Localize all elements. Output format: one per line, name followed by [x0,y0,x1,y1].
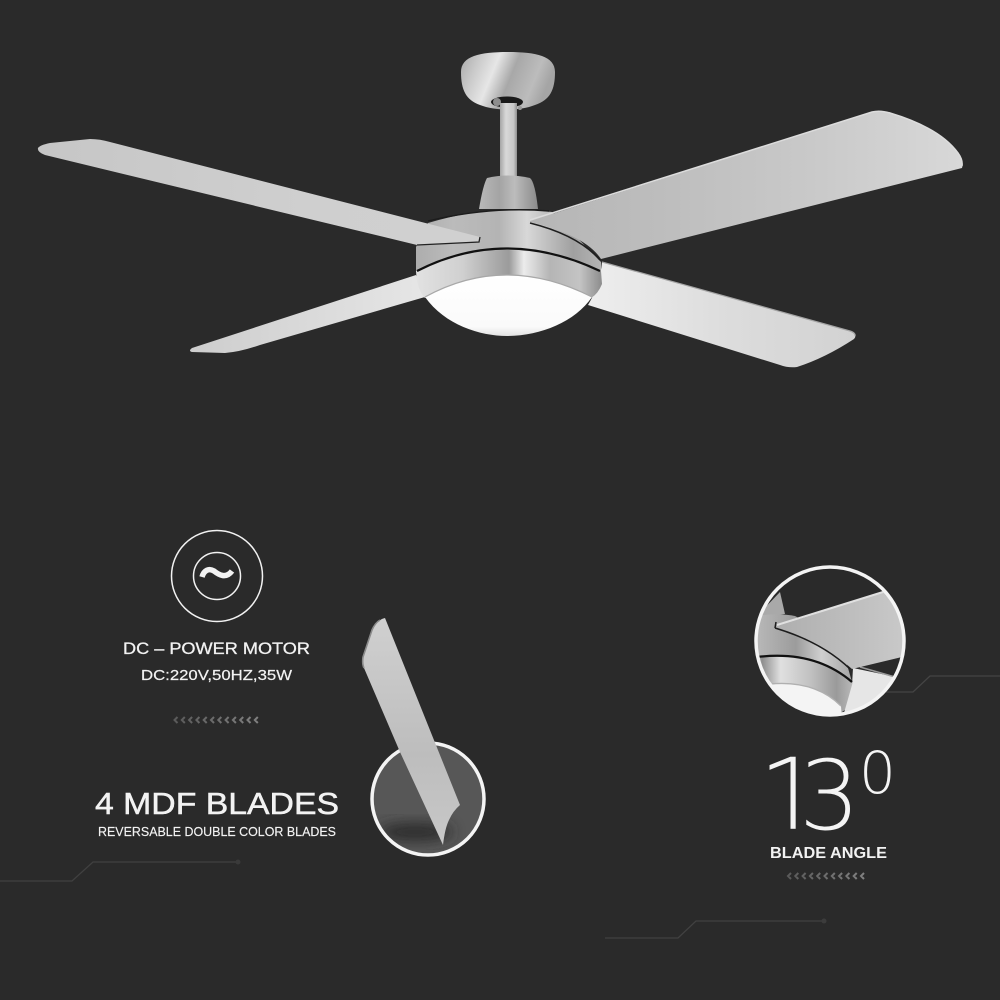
detail: housing [758,614,852,680]
light dome [425,275,592,336]
trim ring [416,248,602,298]
detail: lower blade [844,668,892,712]
detail: trim ring [760,656,852,712]
down rod [500,103,517,176]
number: 13 degrees: 3 [799,740,860,852]
blade side view [363,618,460,845]
number: 13 degrees [755,736,896,858]
icon: DC motor [172,530,262,622]
text: DC power motor: DC – POWER MOTOR [123,639,310,658]
number: 13 degrees: 1 [758,736,825,858]
circuit line: bottom [605,918,826,938]
ceiling mount [461,52,555,110]
detail: upper blade [780,592,902,669]
text: reversible blades: REVERSABLE DOUBLE COLOR BLADES [98,824,336,839]
circuit line: lower left [0,860,240,881]
circle: blade angle detail [750,567,910,720]
motor housing [416,210,601,272]
blade: upper left [38,139,480,245]
text: DC rating: DC:220V,50HZ,35W [141,668,292,684]
circle: blade side view [372,743,484,855]
detail: motor neck [762,592,785,616]
blade: upper right [530,111,962,260]
number: 13 degrees: 0 [859,739,896,807]
ceiling fan [38,52,962,367]
blade: lower right [588,262,855,367]
chevron divider: right [788,873,864,879]
detail: light dome [772,684,842,714]
label: blade angle: BLADE ANGLE [770,845,887,862]
heading: 4 MDF blades: 4 MDF BLADES [95,786,339,821]
circuit line: right [886,676,1000,692]
chevron divider: left [174,717,258,723]
blade: lower left [190,275,425,353]
motor neck [479,176,538,209]
